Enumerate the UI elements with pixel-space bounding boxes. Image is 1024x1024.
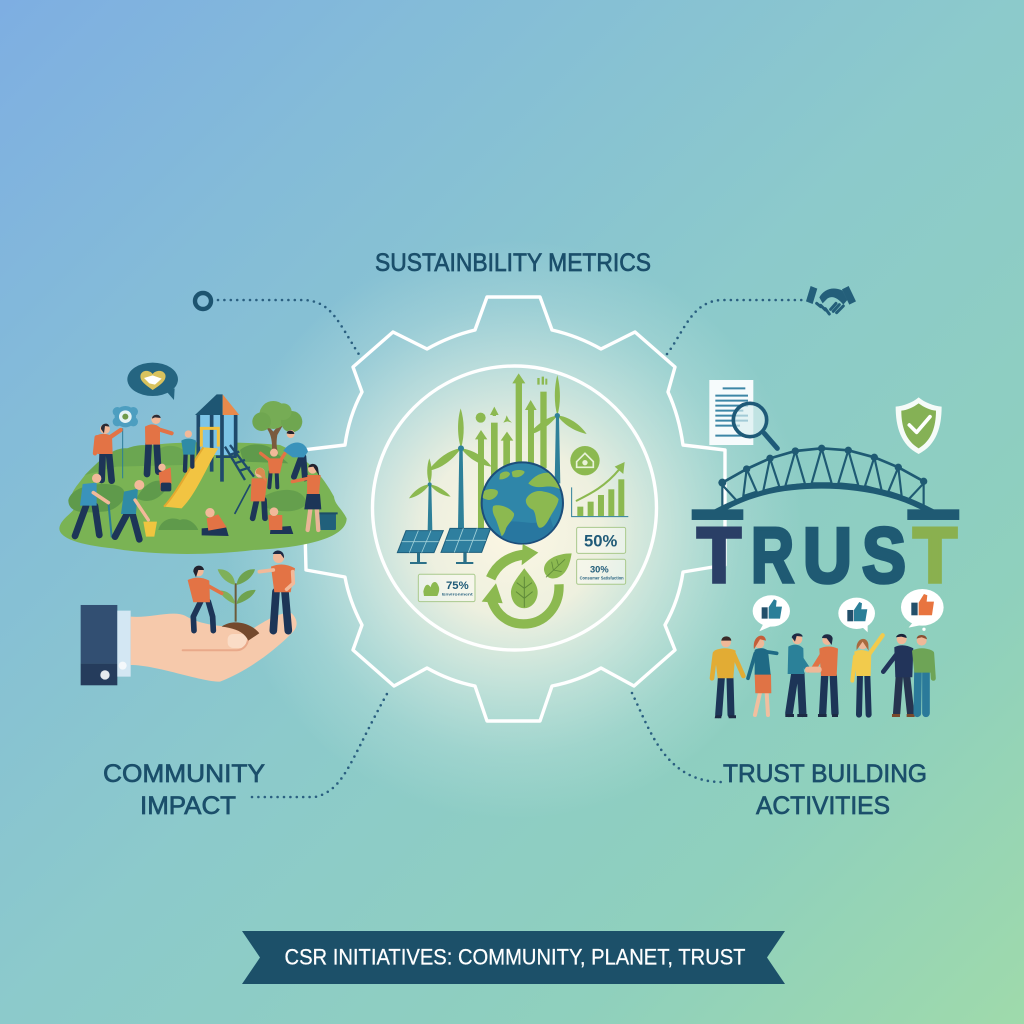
person woman yellow: [852, 635, 883, 715]
small eco icons: [476, 377, 547, 423]
volunteer woman: [188, 566, 222, 631]
panel: people group: [712, 589, 944, 718]
person yellow sweater: [712, 636, 743, 718]
heading: trust building activities: ACTIVITIES: [756, 792, 890, 820]
trust wordmark: S: [862, 511, 906, 599]
wind turbine large: [528, 375, 587, 483]
stat box 75%: Environment: [442, 591, 473, 596]
wind turbine small: [409, 458, 451, 530]
panel: hand holding plant: [81, 550, 297, 685]
icon: speech bubble heart: [127, 363, 178, 400]
ground: [59, 442, 347, 554]
child teal: [181, 430, 196, 471]
icon: handshake: [806, 286, 856, 314]
person green: [912, 635, 933, 713]
playground: [164, 394, 254, 508]
icon: shield check: [896, 397, 942, 454]
hills and bushes: [68, 444, 307, 530]
hand: [131, 613, 297, 682]
icon: leaf: [544, 553, 572, 579]
stat box 30%: [577, 559, 626, 584]
volunteer blue with bucket: [115, 480, 157, 539]
heading: trust building activities: TRUST BUILDING: [723, 760, 927, 788]
heading: community impact: [103, 760, 265, 820]
trust wordmark: T: [697, 511, 741, 599]
icon: document with magnifier: [709, 380, 777, 448]
child sitting right: [268, 507, 293, 534]
person woman orange skirt: [748, 636, 777, 715]
connector: bottom left: [252, 692, 388, 797]
stat box 30%: Consumer Satisfaction: [580, 575, 624, 580]
volunteer blue with shovel: [75, 474, 112, 537]
inner circle: [372, 366, 656, 650]
panel: trust illustration: [692, 380, 959, 520]
wind turbine medium: [428, 408, 492, 528]
volunteer man: [259, 550, 295, 631]
bridge: [692, 445, 959, 520]
trust wordmark: R: [751, 511, 794, 599]
speech bubble thumbs up 2: [838, 598, 875, 632]
growth arrows bars: [475, 373, 547, 528]
volunteer standing left: [95, 424, 121, 481]
title banner: CSR INITIATIVES: COMMUNITY, PLANET, TRUST: [284, 944, 746, 970]
stat box 75%: 75%: [446, 580, 469, 592]
icon: flower: [113, 406, 138, 478]
adult leaning blue: [283, 430, 308, 478]
speech bubble thumbs up 1: [753, 595, 790, 631]
stat box 30%: 30%: [590, 565, 609, 575]
trust wordmark: [697, 511, 957, 599]
connector: top right: [667, 300, 805, 354]
icon: leaf drop: [511, 568, 538, 608]
heading: community impact: IMPACT: [140, 792, 236, 820]
child planting: [202, 508, 229, 536]
solar panels: [397, 528, 491, 564]
mini bar chart: [572, 462, 628, 517]
heading: trust building activities: [723, 760, 927, 820]
volunteer standing center: [145, 415, 172, 474]
person orange handshake: [805, 634, 838, 717]
panel: sustainability illustration: [397, 373, 628, 624]
child kneeling: [158, 464, 172, 492]
stat box 75%: [418, 574, 475, 602]
stat box 50%: [577, 527, 626, 553]
trust wordmark: T: [913, 511, 957, 599]
globe: [481, 462, 564, 550]
connector: bottom right: [632, 693, 722, 782]
icon: eco badge: [570, 446, 600, 475]
title banner: [242, 931, 785, 984]
gear outline: [303, 297, 725, 721]
heading: sustainability metrics: SUSTAINBILITY METRICS: [375, 249, 651, 277]
stat box 50%: 50%: [584, 531, 617, 550]
connector: top left: [218, 300, 360, 356]
heading: community impact: COMMUNITY: [103, 760, 265, 788]
panel: community park island: [59, 363, 347, 554]
center glow: [224, 240, 804, 820]
tree: [252, 401, 302, 453]
child orange right: [261, 449, 285, 487]
recycle arrows: [482, 544, 559, 624]
cuff: [81, 605, 131, 685]
trust wordmark: U: [803, 511, 852, 599]
person teal handshake: [785, 633, 808, 717]
volunteer with rake: [235, 468, 267, 518]
woman with trash can: [292, 464, 338, 530]
person navy suit: [883, 634, 915, 717]
speech bubble thumbs up 3: [901, 589, 944, 631]
icon: ring node: [195, 293, 211, 309]
soil and plant: [218, 569, 259, 641]
